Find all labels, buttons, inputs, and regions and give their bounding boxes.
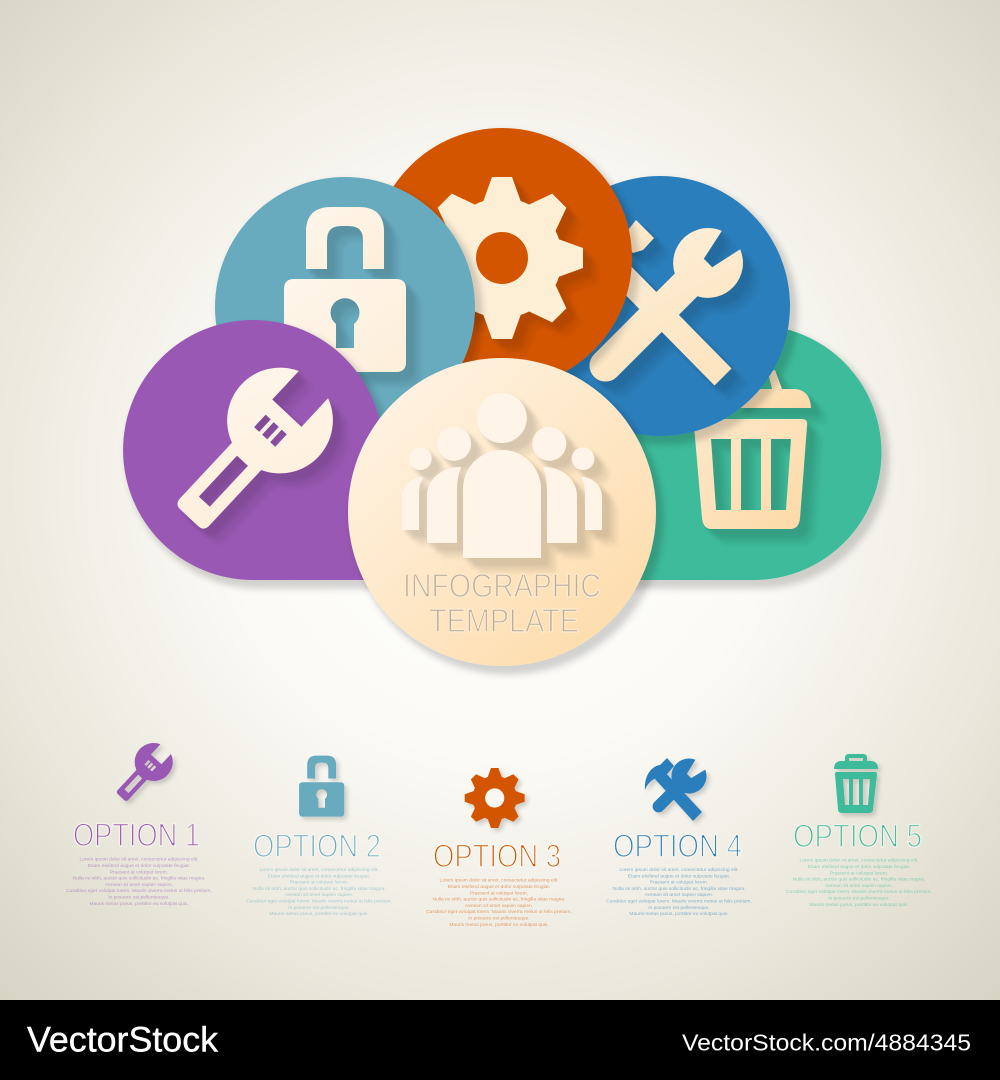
text block: option 3: Etiam eleifend augue et dolor vulputate feugiat.	[448, 884, 550, 890]
icon: adjustable wrench	[151, 349, 352, 554]
footer bar	[0, 1000, 1000, 1080]
text block: option 4: Etiam eleifend augue et dolor vulputate feugiat.	[628, 873, 730, 879]
text block: option 5: Etiam eleifend augue et dolor vulputate feugiat.	[808, 864, 910, 870]
text block: option 3: Praesent at volutpat lorem.	[470, 890, 528, 896]
text block: option 3	[426, 878, 572, 928]
option 5	[786, 754, 932, 908]
text block: option 5: Aenean sit amet sapien sapien.	[825, 883, 893, 889]
text block: option 4: Aenean sit amet sapien sapien.	[645, 892, 713, 898]
text block: option 1: Praesent at volutpat lorem.	[110, 869, 168, 875]
text block: option 5: Curabitur eget volutpat lorem. Mauris viverra metus ut felis pretium,	[786, 889, 932, 895]
text block: option 5	[786, 858, 932, 908]
text block: option 5: Mauris metus purus, porttitor eu volutpat quis.	[809, 902, 909, 908]
text block: option 2: Lorem ipsum dolor sit amet, consectetur adipiscing elit.	[259, 867, 379, 873]
icon: small hammer and wrench	[642, 752, 713, 823]
panel: teal lock bubble	[215, 177, 475, 437]
panel: purple wrench bubble	[123, 320, 410, 580]
text block: option 1: Nulla mi nibh, auctor quis sollicitudin ac, fringilla vitae magna.	[73, 876, 205, 882]
text block: option 5: in posuere est pellentesque.	[828, 896, 890, 902]
text block: option 3: in posuere est pellentesque.	[468, 916, 530, 922]
heading: option 1: OPTION 1	[73, 817, 200, 853]
text block: option 4: Mauris metus purus, porttitor eu volutpat quis.	[629, 911, 729, 917]
heading: option 3: OPTION 3	[433, 838, 561, 874]
title: INFOGRAPHIC	[403, 567, 601, 604]
text block: option 4: Nulla mi nibh, auctor quis sollicitudin ac, fringilla vitae magna.	[613, 886, 745, 892]
text block: option 2: Praesent at volutpat lorem.	[290, 880, 348, 886]
text block: option 3: Aenean sit amet sapien sapien.	[465, 903, 533, 909]
text block: option 1	[66, 857, 212, 907]
text block: option 1: Lorem ipsum dolor sit amet, consectetur adipiscing elit.	[79, 857, 199, 863]
text block: option 5: Nulla mi nibh, auctor quis sollicitudin ac, fringilla vitae magna.	[793, 877, 925, 883]
text block: option 2: Aenean sit amet sapien sapien.	[285, 892, 353, 898]
option 3	[426, 768, 572, 928]
text block: option 1: Curabitur eget volutpat lorem. Mauris viverra metus ut felis pretium,	[66, 888, 212, 894]
text block: option 4	[606, 867, 752, 917]
icon: gear	[421, 177, 583, 339]
icon: small trash can	[834, 754, 878, 813]
text block: option 1: Etiam eleifend augue et dolor vulputate feugiat.	[88, 863, 190, 869]
icon: small wrench	[107, 736, 180, 810]
text block: option 4: in posuere est pellentesque.	[648, 905, 710, 911]
text block: option 1: in posuere est pellentesque.	[108, 894, 170, 900]
panel: central people disc	[348, 358, 656, 666]
title: TEMPLATE	[429, 602, 579, 639]
text block: option 2: Curabitur eget volutpat lorem. Mauris viverra metus ut felis pretium,	[246, 898, 392, 904]
text block: option 2: in posuere est pellentesque.	[288, 905, 350, 911]
option 1	[66, 736, 212, 907]
heading: option 5: OPTION 5	[793, 818, 922, 854]
text block: option 4: Curabitur eget volutpat lorem. Mauris viverra metus ut felis pretium,	[606, 898, 752, 904]
text block: option 5: Praesent at volutpat lorem.	[830, 870, 888, 876]
cloud graphic	[123, 128, 882, 666]
text block: option 1: Mauris metus purus, porttitor eu volutpat quis.	[89, 901, 189, 907]
option 2	[246, 756, 392, 917]
icon: trash can	[694, 370, 811, 529]
text block: option 2: Nulla mi nibh, auctor quis sollicitudin ac, fringilla vitae magna.	[253, 886, 385, 892]
heading: option 2: OPTION 2	[253, 828, 381, 864]
icon: small gear	[465, 768, 525, 828]
icon: small padlock	[299, 756, 344, 817]
icon: hammer and wrench	[570, 215, 756, 401]
icon: group of people	[402, 393, 602, 558]
option 4	[606, 752, 752, 917]
icon: padlock	[284, 207, 406, 372]
text block: option 2: Mauris metus purus, porttitor eu volutpat quis.	[269, 911, 369, 917]
text block: option 4: Lorem ipsum dolor sit amet, consectetur adipiscing elit.	[619, 867, 739, 873]
text block: option 3: Mauris metus purus, porttitor eu volutpat quis.	[449, 922, 549, 928]
heading: option 4: OPTION 4	[613, 828, 742, 864]
text block: option 3: Nulla mi nibh, auctor quis sollicitudin ac, fringilla vitae magna.	[433, 897, 565, 903]
text block: option 3: Curabitur eget volutpat lorem. Mauris viverra metus ut felis pretium,	[426, 909, 572, 915]
footer url: VectorStock.com/4884345	[682, 1030, 971, 1056]
text block: option 3: Lorem ipsum dolor sit amet, consectetur adipiscing elit.	[439, 878, 559, 884]
text block: option 1: Aenean sit amet sapien sapien.	[105, 882, 173, 888]
text block: option 4: Praesent at volutpat lorem.	[650, 880, 708, 886]
panel: blue tools bubble	[530, 176, 790, 436]
footer logo: VectorStock	[27, 1020, 219, 1060]
text block: option 5: Lorem ipsum dolor sit amet, consectetur adipiscing elit.	[799, 858, 919, 864]
title	[403, 567, 601, 639]
panel: green trash bubble	[600, 325, 882, 580]
text block: option 2	[246, 867, 392, 917]
text block: option 2: Etiam eleifend augue et dolor vulputate feugiat.	[268, 873, 370, 879]
panel: orange gear bubble	[372, 128, 632, 388]
